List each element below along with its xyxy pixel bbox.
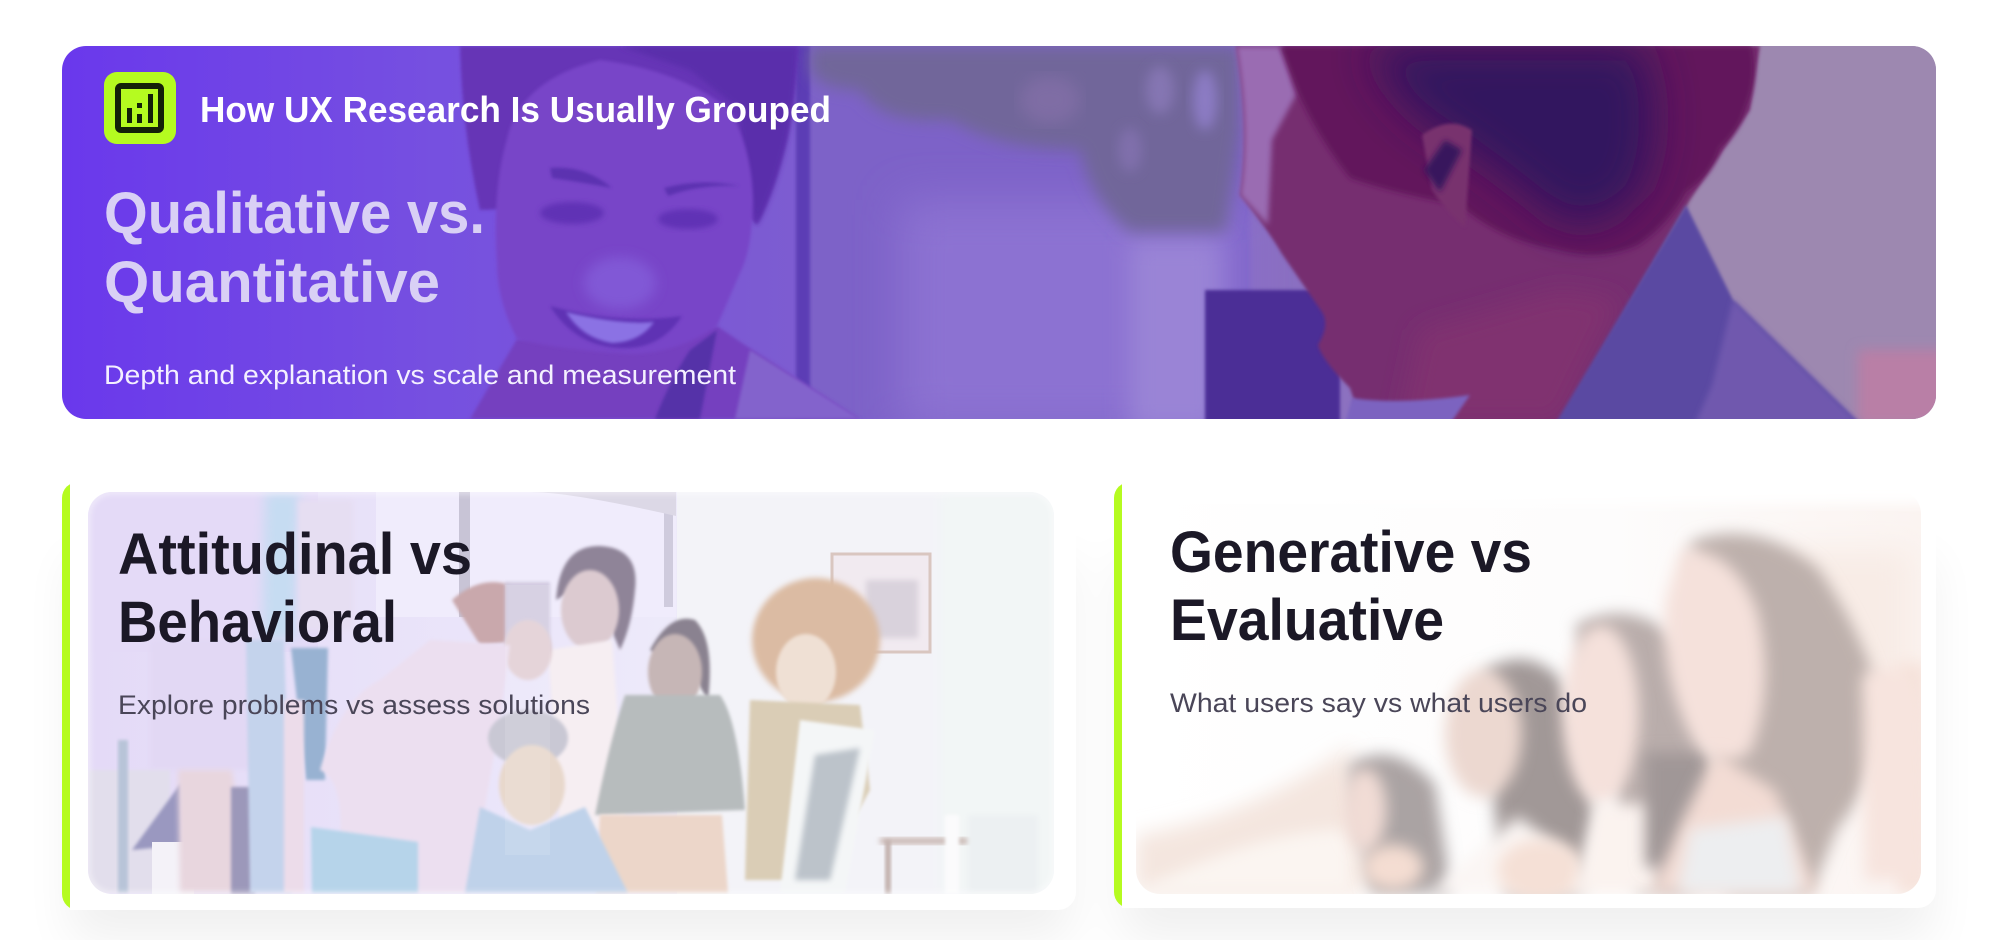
background furniture (877, 818, 971, 894)
background tint (1135, 746, 1365, 893)
door frame (796, 46, 810, 419)
front woman face (1664, 548, 1765, 761)
seated person (464, 709, 628, 894)
card heading: Evaluative (1170, 588, 1444, 653)
card heading (1170, 520, 1532, 653)
plant (810, 46, 1240, 232)
icon: chart badge (104, 72, 176, 144)
panel: hero (62, 46, 1950, 430)
card description: What users say vs what users do (1170, 688, 1587, 718)
monitor (780, 718, 868, 882)
soft image fade at the top (1136, 480, 1936, 504)
card base with accent bar (1114, 482, 1936, 908)
man: face and neck (1236, 46, 1760, 424)
card shadows (70, 560, 1932, 940)
middle woman (1575, 614, 1716, 893)
card base with accent bar (62, 482, 1076, 910)
panel: generative vs evaluative (1114, 480, 1936, 908)
panel: attitudinal vs behavioral (62, 482, 1076, 910)
photo: team around a monitor (88, 492, 1060, 894)
far woman (1349, 755, 1452, 893)
hero description: Depth and explanation vs scale and measurement (104, 360, 737, 390)
dark block (1205, 290, 1340, 425)
woman: face (496, 60, 753, 354)
front woman body (1652, 753, 1818, 893)
front woman hair (1690, 534, 1885, 893)
person in grey top (595, 619, 745, 893)
card heading: Behavioral (118, 590, 397, 655)
person in pink shirt (311, 582, 552, 893)
hero heading (104, 181, 485, 315)
section title: How UX Research Is Usually Grouped (200, 89, 831, 130)
hero heading: Qualitative vs. (104, 181, 485, 246)
hero heading: Quantitative (104, 250, 440, 315)
denim collar (1555, 205, 1860, 424)
photo: women looking up (1135, 490, 1926, 901)
picture frame (832, 554, 930, 652)
dark hair shadow (1645, 753, 1709, 867)
standing person curly hair (548, 546, 636, 830)
woman: shirt and neck (470, 326, 860, 419)
woman: hair (460, 46, 798, 225)
dark haired woman (1486, 659, 1597, 893)
soft image edge (88, 492, 1054, 894)
card heading (118, 522, 472, 655)
card description: Explore problems vs assess solutions (118, 690, 590, 720)
wall behind woman (1239, 162, 1247, 220)
person with curly hair (745, 578, 880, 880)
hero photo: two people talking (62, 46, 1950, 430)
windows (376, 492, 712, 652)
man: hair (1280, 46, 1754, 255)
card heading: Generative vs (1170, 520, 1532, 585)
card heading: Attitudinal vs (118, 522, 472, 587)
left clothes rack (88, 492, 353, 894)
